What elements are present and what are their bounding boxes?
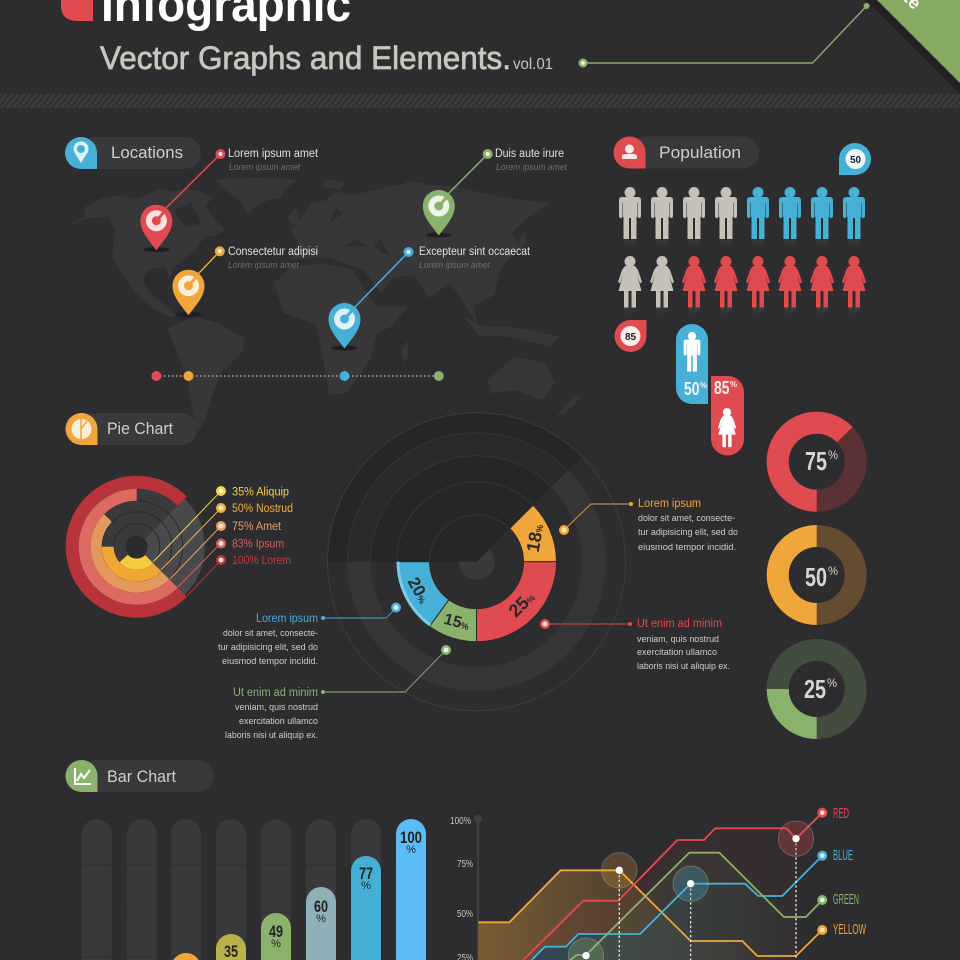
radial progress chart (72, 482, 205, 611)
orange callout: Lorem ipsum (638, 498, 701, 510)
donut: 50 percent (767, 525, 856, 625)
donut: 50 percent: % (828, 564, 838, 578)
badge 50 (839, 143, 871, 175)
men row (619, 187, 865, 248)
female share pill: % (730, 380, 737, 389)
bar tracks (81, 819, 382, 960)
blue pin (328, 303, 360, 350)
bar 49: 49 (269, 922, 283, 941)
pin label dots (215, 149, 493, 257)
red callout: veniam, quis nostrud (637, 634, 719, 645)
line chart (450, 805, 866, 960)
location timeline (151, 371, 444, 381)
bar 100: 100 (400, 828, 422, 847)
axis (450, 815, 482, 960)
population heading: Population (659, 143, 741, 162)
large segmented donut: 20% (404, 574, 434, 607)
donut: 75 percent: % (828, 448, 838, 462)
green callout: Ut enim ad minim (233, 687, 318, 699)
bar 49: % (271, 938, 281, 950)
panel: bar chart (66, 760, 426, 960)
panel: population (614, 136, 871, 456)
axis: 75% (457, 859, 473, 870)
pin connector lines (166, 154, 488, 308)
locations heading (65, 137, 201, 169)
axis: 100% (450, 816, 471, 827)
series labels (833, 805, 866, 938)
panel: pie chart (66, 413, 738, 741)
location labels: Excepteur sint occaecat (419, 246, 531, 258)
red callout: laboris nisi ut aliquip ex. (637, 661, 730, 672)
bar 60 (306, 887, 336, 960)
donut: 25 percent: 25 (804, 674, 826, 704)
donut: 75 percent: 75 (805, 446, 827, 476)
bar 35 (216, 934, 246, 960)
bar 60: % (316, 913, 326, 925)
bar 77 (351, 856, 381, 960)
blue callout: Lorem ipsum (256, 613, 318, 625)
radial chart legend: 75% Amet (232, 521, 282, 533)
orange callout: dolor sit amet, consecte- (638, 513, 735, 524)
large segmented donut: 18% (523, 522, 547, 554)
pie chart heading (66, 413, 197, 445)
pie chart heading: Pie Chart (107, 419, 173, 438)
radial chart leaders (153, 491, 221, 596)
female share pill (711, 376, 744, 456)
population heading (614, 136, 759, 168)
bar 77: % (361, 880, 371, 892)
bar 49 (261, 913, 291, 960)
radial chart legend: 100% Lorem (232, 555, 291, 567)
title marker (61, 0, 93, 21)
donut: 25 percent: % (827, 676, 837, 690)
location labels: Lorem ipsum amet (229, 162, 300, 172)
male share pill (676, 324, 708, 404)
blue callout: eiusmod tempor incidid. (222, 656, 318, 667)
world map (65, 177, 580, 432)
series plot (478, 808, 827, 960)
male share pill: % (700, 381, 707, 390)
large segmented donut: 25% (505, 587, 539, 621)
orange callout (559, 498, 738, 553)
corner ribbon (866, 0, 960, 94)
blue callout: dolor sit amet, consecte- (223, 628, 318, 639)
badge 50: 50 (850, 155, 861, 166)
green callout: laboris nisi ut aliquip ex. (225, 730, 318, 741)
location labels: Lorem ipsum amet (419, 260, 490, 270)
large segmented donut: 15% (442, 611, 471, 634)
bar 100: % (406, 844, 416, 856)
orange callout: tur adipisicing elit, sed do (638, 527, 738, 538)
male share pill: 50 (684, 379, 700, 399)
radial chart legend: 50% Nostrud (232, 503, 293, 515)
bar 77: 77 (359, 864, 373, 883)
radial chart legend: 35% Aliquip (232, 486, 289, 498)
red callout (540, 618, 730, 672)
location labels: Lorem ipsum amet (496, 162, 567, 172)
header connector (578, 3, 870, 68)
donut: 75 percent (767, 412, 856, 512)
large segmented donut (328, 413, 626, 711)
donut: 50 percent: 50 (805, 562, 827, 592)
orange callout: eiusmod tempor incidid. (638, 542, 736, 553)
radial chart legend (216, 486, 293, 567)
green pin (423, 190, 455, 238)
location labels: Consectetur adipisi (228, 246, 318, 258)
series labels: GREEN (833, 891, 859, 908)
header (61, 0, 960, 94)
red callout: Ut enim ad minim (637, 618, 722, 630)
location labels: Duis aute irure (495, 148, 564, 160)
blue callout (218, 602, 401, 667)
volume: vol.01 (513, 56, 553, 73)
series labels: RED (833, 805, 849, 822)
donut: 25 percent (767, 650, 856, 739)
bar chart heading: Bar Chart (107, 767, 176, 786)
red callout: exercitation ullamco (637, 647, 717, 658)
location labels: Lorem ipsum amet (228, 148, 319, 160)
location labels (228, 148, 567, 270)
bar 60: 60 (314, 897, 328, 916)
female share pill: 85 (714, 378, 730, 398)
series labels: YELLOW (833, 921, 866, 938)
locations heading: Locations (111, 143, 183, 162)
orange pin (172, 270, 204, 317)
women row (618, 256, 866, 316)
badge 85 (614, 320, 646, 352)
green callout: exercitation ullamco (239, 716, 318, 727)
red pin (140, 205, 172, 252)
bar chart heading (66, 760, 214, 792)
subtitle: Vector Graphs and Elements. (100, 40, 511, 76)
green callout (225, 645, 451, 741)
badge 85: 85 (625, 332, 636, 343)
radial chart legend: 83% Ipsum (232, 538, 284, 550)
bar 100 (396, 819, 426, 960)
green callout: veniam, quis nostrud (235, 702, 318, 713)
panel: locations (65, 137, 567, 381)
blue callout: tur adipisicing elit, sed do (218, 642, 318, 653)
location labels: Lorem ipsum amet (228, 260, 299, 270)
axis: 50% (457, 909, 473, 920)
series labels: BLUE (833, 847, 853, 864)
bar orange (171, 953, 201, 960)
